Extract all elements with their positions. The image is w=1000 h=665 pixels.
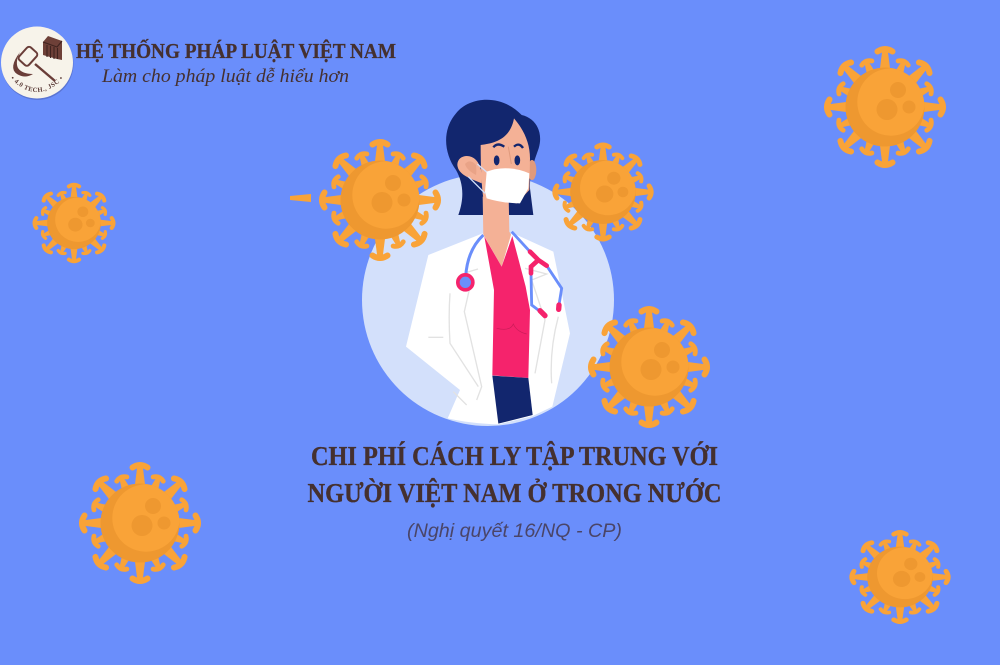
virus: bottom left (82, 465, 198, 581)
eyebrows (493, 144, 523, 148)
face mask (485, 168, 529, 203)
ear shadow (465, 161, 476, 175)
virus: centre lower right (591, 309, 707, 425)
doctor illustration (406, 100, 570, 424)
virus: top right corner (827, 49, 943, 165)
virus: left (35, 185, 113, 261)
icon: books (43, 36, 62, 60)
main title (308, 441, 722, 508)
main title: CHI PHÍ CÁCH LY TẬP TRUNG VỚI (311, 441, 718, 471)
logo caption: • 4.0 TECH., JSC • (12, 76, 62, 92)
heading: organisation name: HỆ THỐNG PHÁP LUẬT VIỆT NAM (76, 39, 396, 63)
nose (508, 147, 511, 164)
main title: NGƯỜI VIỆT NAM Ở TRONG NƯỚC (308, 478, 722, 508)
virus: centre top right (555, 145, 651, 239)
white coat (406, 233, 570, 424)
tagline: Làm cho pháp luật dễ hiểu hơn (101, 66, 349, 87)
backdrop circle (362, 174, 614, 426)
far ear (528, 160, 536, 180)
mask strap (468, 164, 487, 193)
hair (446, 100, 540, 215)
subtitle: legal reference: (Nghị quyết 16/NQ - CP) (407, 521, 622, 542)
virus: centre top left (322, 142, 438, 258)
trousers (492, 376, 533, 424)
virus: bottom right (852, 532, 948, 622)
logo badge (1, 26, 74, 100)
neck (483, 197, 513, 267)
icon: gavel (13, 46, 55, 81)
eyes (494, 155, 520, 165)
stethoscope (458, 232, 562, 316)
ear (457, 156, 482, 183)
face (481, 118, 530, 203)
shirt (484, 236, 530, 378)
arrow marker (290, 194, 311, 202)
coat folds (428, 268, 558, 405)
